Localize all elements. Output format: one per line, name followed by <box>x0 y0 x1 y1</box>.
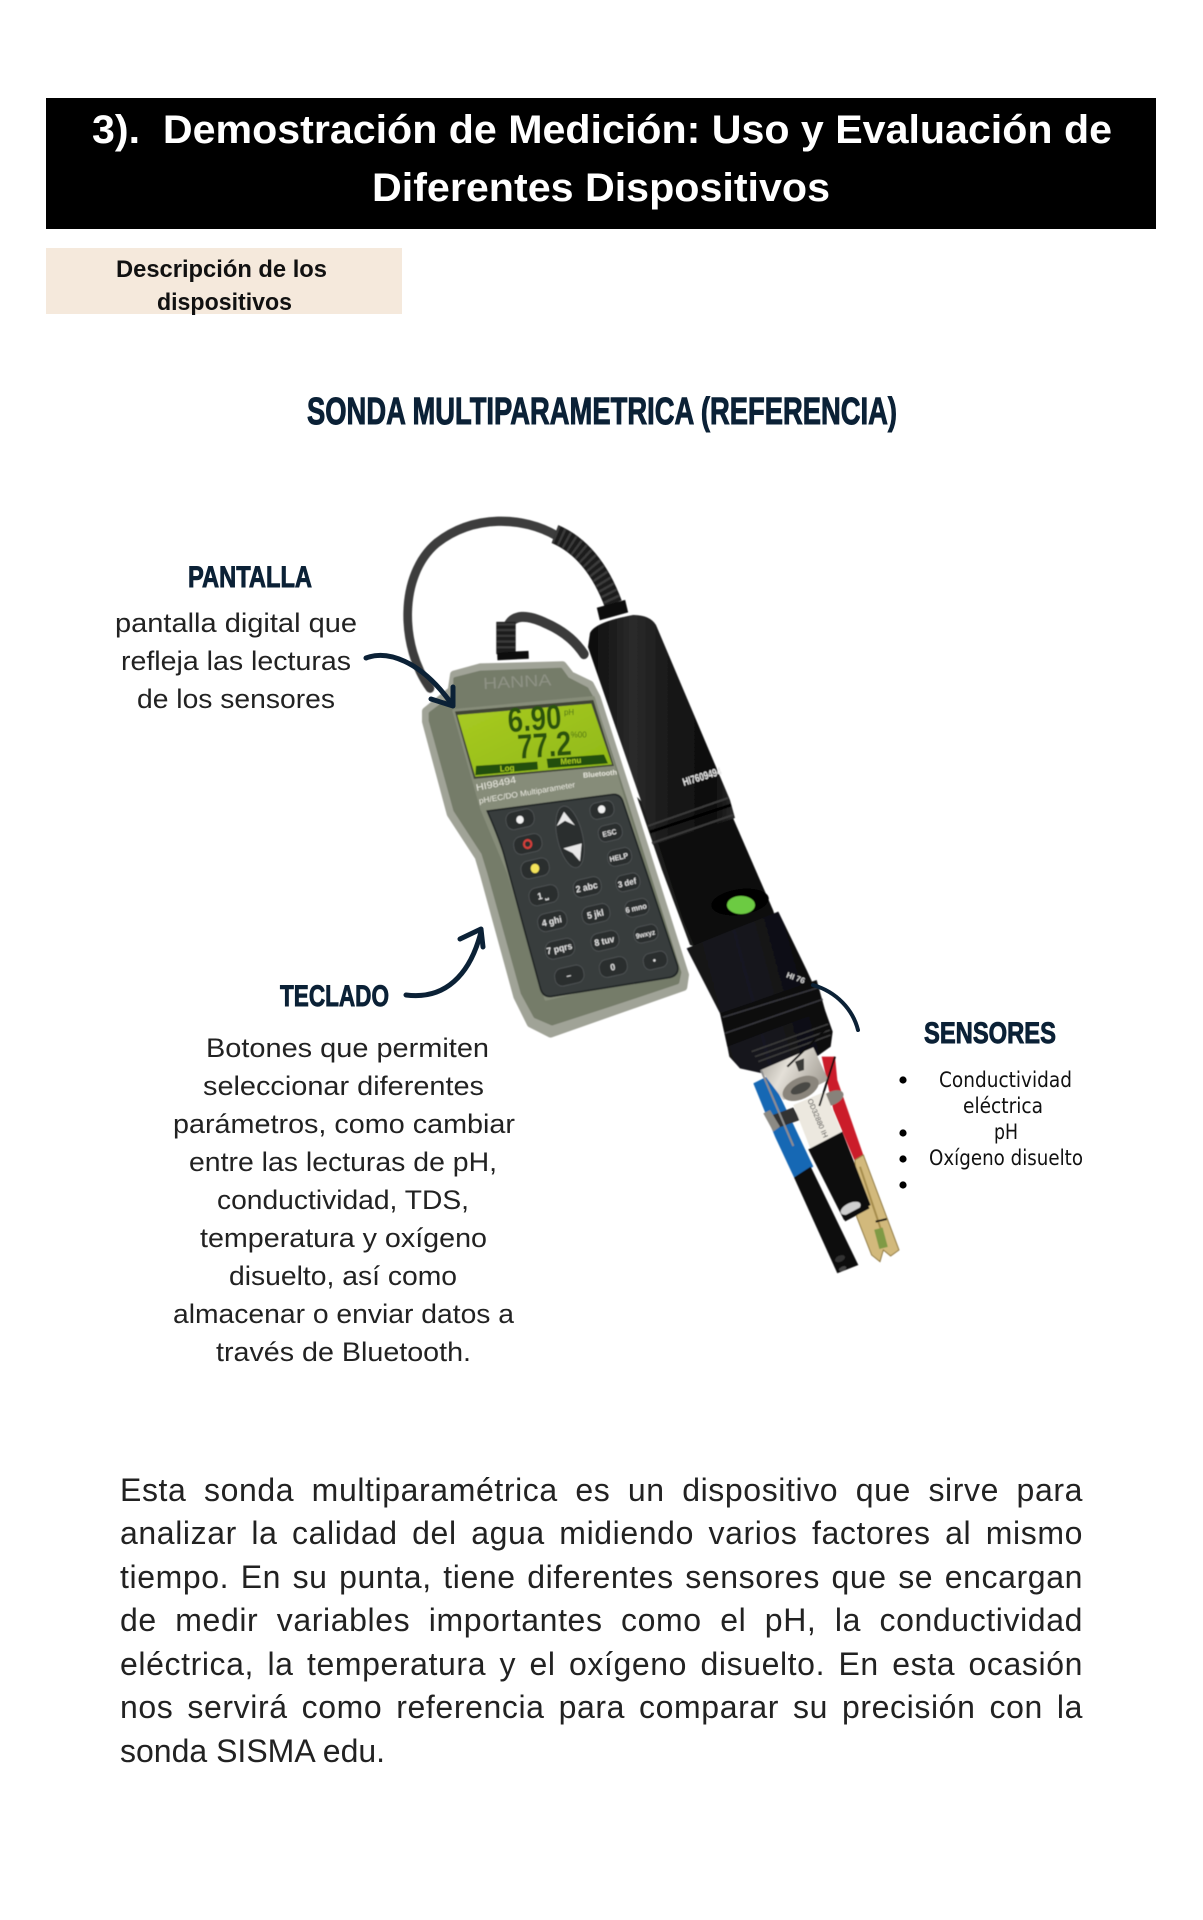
label: teclado: conductividad, TDS, <box>217 1185 469 1215</box>
arrow: sensores arc <box>813 985 858 1030</box>
keypad: 1 ⎵ <box>536 889 549 902</box>
body paragraph: tiempo. En su punta, tiene diferentes sensores que se encargan <box>120 1558 1083 1594</box>
probe upper cylinder: HI7609494 <box>681 766 724 789</box>
lcd screen: Log <box>499 762 515 774</box>
label: pantalla: de los sensores <box>137 684 335 714</box>
keypad: – <box>565 970 572 981</box>
label: teclado: Botones que permiten <box>206 1033 489 1063</box>
lcd screen: pH <box>564 707 574 717</box>
device illustration: multiparameter probe and meter <box>408 521 899 1273</box>
yellow glass sensor <box>855 1155 899 1262</box>
label: pantalla: refleja las lecturas <box>121 646 351 676</box>
label: pantalla: pantalla digital que <box>115 608 357 638</box>
subtitle: sonda multiparametrica: SONDA MULTIPARAMETRICA (REFERENCIA) <box>307 391 897 433</box>
label: teclado: través de Bluetooth. <box>216 1337 471 1367</box>
body paragraph: eléctrica, la temperatura y el oxígeno disuelto. En esta ocasión <box>120 1646 1083 1682</box>
keypad: 8 tuv <box>593 934 615 948</box>
probe sensors <box>753 1027 899 1273</box>
label: teclado <box>173 980 515 1367</box>
steel rod <box>761 1070 793 1146</box>
keypad: 2 abc <box>575 880 599 895</box>
lcd screen <box>455 698 614 779</box>
arrow: teclado to keypad <box>406 929 483 996</box>
label: teclado: seleccionar diferentes <box>203 1071 484 1101</box>
label: sensores <box>899 1017 1083 1189</box>
label: sensores: SENSORES <box>924 1017 1056 1050</box>
section tag: descripción de los dispositivos <box>46 248 402 316</box>
label: teclado: almacenar o enviar datos a <box>173 1299 515 1329</box>
keypad: 6 mno <box>625 901 648 915</box>
keypad: 9wxyz <box>635 929 656 941</box>
section tag: descripción de los dispositivos: Descripción de los <box>116 256 327 283</box>
body paragraph: analizar la calidad del agua midiendo varios factores al mismo <box>120 1515 1083 1551</box>
body paragraph: nos servirá como referencia para comparar su precisión con la <box>120 1689 1083 1725</box>
lcd screen: %00 <box>571 729 587 740</box>
model labels: HI98494 <box>475 775 517 793</box>
title banner: Diferentes Dispositivos <box>372 166 830 210</box>
label: teclado: disuelto, así como <box>229 1261 457 1291</box>
body paragraph: de medir variables importantes como el pH, la conductividad <box>120 1602 1083 1638</box>
keypad: 7 pqrs <box>546 941 573 957</box>
model labels <box>475 769 617 806</box>
steel housing <box>761 1047 828 1100</box>
keypad: 3 def <box>617 875 637 890</box>
lcd screen: 6.90 <box>506 698 563 741</box>
body paragraph: sonda SISMA edu. <box>120 1732 385 1768</box>
lcd screen: 77.2 <box>516 725 573 767</box>
arrow: pantalla to screen <box>366 655 453 706</box>
red sensor <box>822 1057 863 1162</box>
blue sensor <box>753 1075 813 1177</box>
body paragraph <box>120 1472 1083 1768</box>
probe collar <box>687 912 833 1075</box>
label: teclado: temperatura y oxígeno <box>200 1223 487 1253</box>
label: pantalla: PANTALLA <box>188 561 312 594</box>
keypad: ESC <box>602 827 618 839</box>
pointer lines <box>787 1027 887 1222</box>
meter body <box>426 666 685 1033</box>
black sensor <box>794 1167 858 1273</box>
body paragraph: Esta sonda multiparamétrica es un dispositivo que sirve para <box>120 1472 1083 1508</box>
label: teclado: parámetros, como cambiar <box>173 1109 515 1139</box>
keypad: 5 jkl <box>586 907 605 921</box>
model labels: pH/EC/DO Multiparameter <box>478 780 576 806</box>
section tag: descripción de los dispositivos: dispositivos <box>157 289 292 316</box>
title banner <box>46 98 1156 229</box>
probe sensors: OD32880 IH <box>805 1097 830 1139</box>
label: pantalla <box>115 561 357 714</box>
dissolved oxygen sensor <box>808 1132 871 1220</box>
keypad <box>487 794 678 997</box>
keypad: 4 ghi <box>541 914 563 929</box>
white sensor <box>793 1092 842 1149</box>
keypad: HELP <box>609 851 629 864</box>
logo text: HANNA <box>483 672 552 693</box>
probe upper cylinder <box>588 615 790 960</box>
label: sensores: Conductividad <box>939 1068 1072 1092</box>
keypad: • <box>652 955 657 966</box>
keypad: 0 <box>609 962 616 973</box>
label: sensores: Oxígeno disuelto <box>929 1146 1083 1170</box>
label: teclado: TECLADO <box>280 980 389 1013</box>
title banner: 3). Demostración de Medición: Uso y Evaluación de <box>92 108 1112 152</box>
label: sensores: eléctrica <box>963 1094 1043 1118</box>
meter cables <box>408 521 627 688</box>
label: sensores: pH <box>994 1120 1018 1144</box>
lcd screen: Menu <box>560 755 582 767</box>
probe collar: HI 76 <box>785 971 807 986</box>
model labels: Bluetooth <box>583 769 617 780</box>
label: teclado: entre las lecturas de pH, <box>189 1147 497 1177</box>
